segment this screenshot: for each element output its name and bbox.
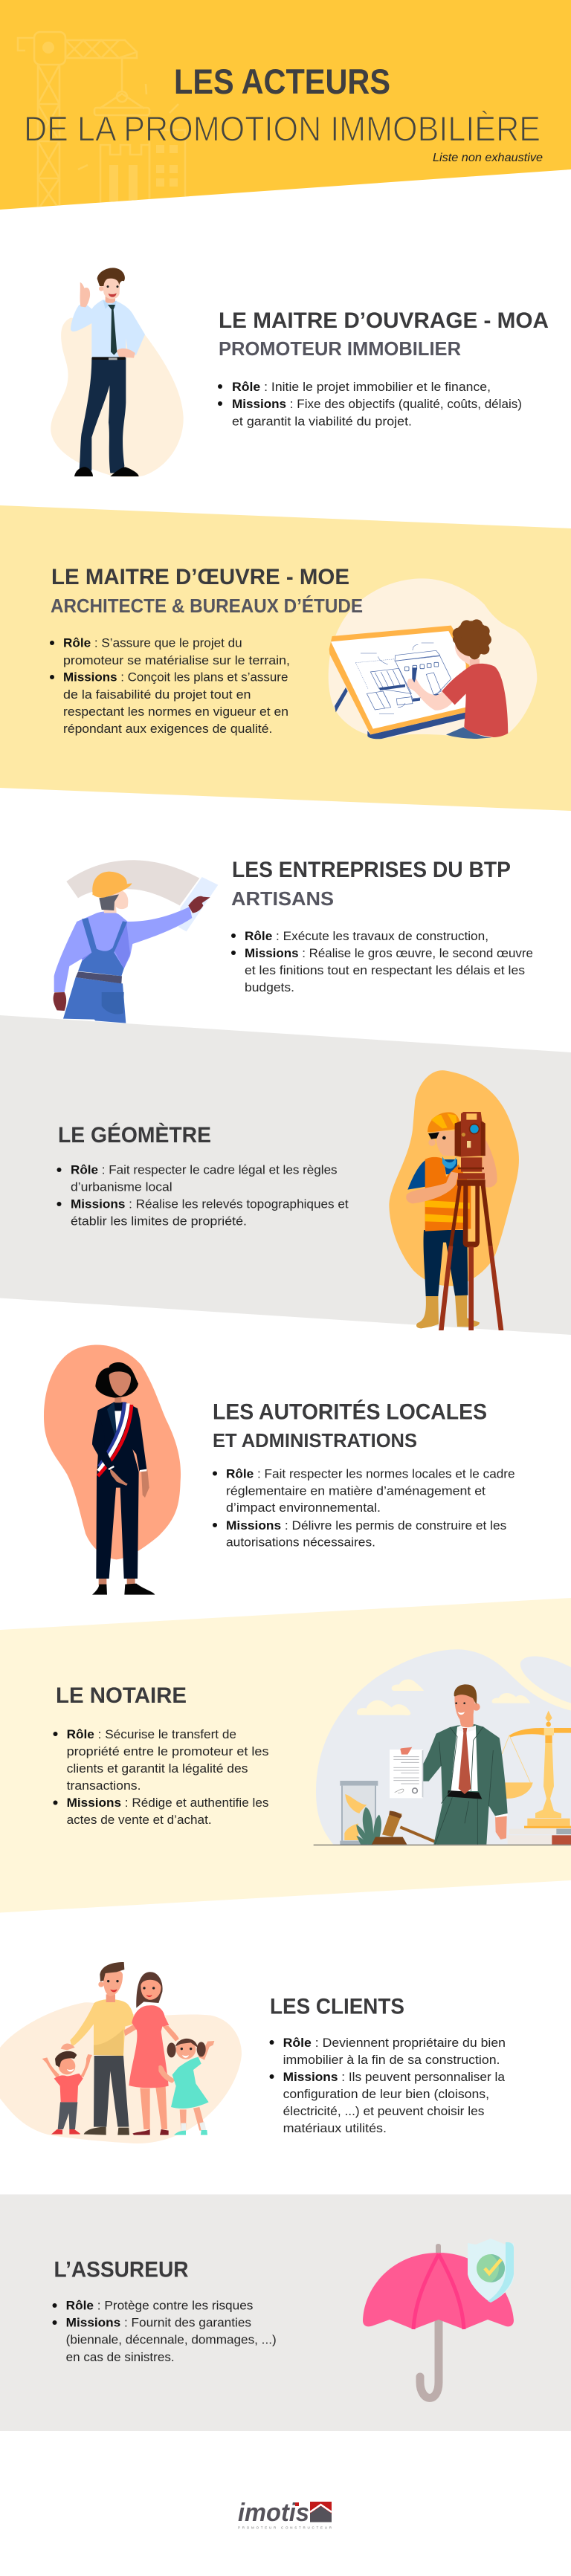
text block: role and missions: d’urbanisme local [71, 1181, 172, 1194]
subheading: ET ADMINISTRATIONS [213, 1429, 417, 1452]
text block: role and missions: configuration de leur bien (cloisons, [283, 2088, 489, 2101]
logo: imotis: imotis [238, 2499, 309, 2527]
illustration: developer giving thumbs up [51, 268, 184, 477]
text block: role and missions: électricité, ...) et peuvent choisir les [283, 2105, 484, 2118]
text block: role and missions: Missions : Rédige et authentifie les [67, 1796, 268, 1810]
title: DE LA PROMOTION IMMOBILIÈRE [24, 109, 541, 149]
text block: role and missions: Rôle : Protège contre les risques [66, 2300, 253, 2313]
text block: role and missions [218, 381, 522, 428]
panel background [0, 1015, 571, 1335]
title: LES ACTEURS [174, 62, 390, 101]
text block: role and missions: Missions : Fixe des objectifs (qualité, coûts, délais) [232, 398, 522, 411]
illustration: architect at drawing board [329, 578, 537, 739]
text block: role and missions: d’impact environnemental. [226, 1501, 381, 1515]
panel: assureur [0, 2194, 571, 2431]
text block: role and missions: et garantit la viabilité du projet. [232, 415, 412, 428]
text block: role and missions: réglementaire en matière d’aménagement et [226, 1484, 486, 1498]
panel background [0, 505, 571, 811]
text block: role and missions: Rôle : S’assure que le projet du [63, 637, 242, 650]
subheading: ARCHITECTE & BUREAUX D’ÉTUDE [51, 595, 363, 617]
text block: role and missions: en cas de sinistres. [66, 2351, 175, 2364]
panel: entreprises du BTP [54, 858, 533, 1023]
text block: role and missions [231, 930, 533, 994]
subheading: ARTISANS [231, 887, 334, 910]
text block: role and missions: propriété entre le promoteur et les [67, 1745, 268, 1758]
panel: header [0, 0, 571, 216]
text block: role and missions: Missions : Réalise les relevés topographiques et [71, 1198, 349, 1211]
text block: role and missions: Rôle : Fait respecter le cadre légal et les règles [71, 1164, 338, 1177]
text block: role and missions [269, 2036, 506, 2135]
header yellow background [0, 0, 571, 210]
text block: role and missions [213, 1467, 515, 1550]
text block: role and missions: matériaux utilités. [283, 2122, 387, 2135]
text block: role and missions [52, 2300, 277, 2364]
text block: role and missions: établir les limites de propriété. [71, 1215, 247, 1229]
heading: LES AUTORITÉS LOCALES [213, 1399, 487, 1424]
illustration: family of four [0, 1962, 242, 2143]
text block: role and missions [50, 637, 290, 736]
text block: role and missions: actes de vente et d’achat. [67, 1813, 212, 1827]
text block: role and missions: Missions : Conçoit les plans et s’assure [63, 671, 288, 685]
icon: umbrella with shield [363, 2239, 514, 2398]
text block: role and missions: transactions. [67, 1779, 141, 1793]
panel background [0, 2194, 571, 2431]
heading: LE GÉOMÈTRE [58, 1122, 211, 1148]
heading: LE MAITRE D’ŒUVRE - MOE [51, 565, 349, 589]
panel: notaire [0, 1598, 571, 1913]
icon: crane and building watermark [18, 32, 185, 216]
text block: role and missions: Missions : Réalise le gros œuvre, le second œuvre [245, 947, 533, 960]
text block: role and missions: budgets. [245, 981, 294, 994]
illustration: surveyor with theodolite [389, 1070, 519, 1330]
heading: LES ENTREPRISES DU BTP [232, 858, 511, 882]
heading: LE MAITRE D’OUVRAGE - MOA [219, 308, 549, 333]
panel: maitre d'ouvrage [51, 268, 549, 477]
text block: role and missions: (biennale, décennale, dommages, ...) [66, 2334, 277, 2347]
text block: role and missions [57, 1164, 349, 1229]
panel: maitre d'oeuvre [0, 505, 571, 811]
text block: role and missions: Rôle : Sécurise le transfert de [67, 1728, 236, 1741]
subheading: PROMOTEUR IMMOBILIER [219, 337, 461, 360]
panel background [0, 1598, 571, 1913]
text block: role and missions: Rôle : Fait respecter les normes locales et le cadre [226, 1467, 515, 1480]
text block: role and missions [54, 1728, 269, 1827]
text block: role and missions: respectant les normes en vigueur et en [63, 705, 288, 719]
title [24, 62, 541, 149]
text block: role and missions: répondant aux exigences de qualité. [63, 722, 272, 736]
panel: géomètre [0, 1015, 571, 1335]
panel: autorités locales [44, 1344, 515, 1595]
text block: role and missions: clients et garantit la légalité des [67, 1762, 248, 1776]
text block: role and missions: Rôle : Initie le projet immobilier et le finance, [232, 381, 491, 394]
heading: L’ASSUREUR [54, 2258, 189, 2282]
heading: LE NOTAIRE [56, 1683, 187, 1708]
text block: role and missions: Missions : Délivre les permis de construire et les [226, 1519, 506, 1533]
text block: role and missions: immobilier à la fin de sa construction. [283, 2054, 500, 2067]
panel: clients [0, 1962, 506, 2143]
heading: LES CLIENTS [270, 1995, 404, 2019]
text block: role and missions: de la faisabilité du projet tout en [63, 688, 251, 702]
text block: role and missions: autorisations nécessaires. [226, 1536, 375, 1550]
text block: role and missions: Missions : Fournit des garanties [66, 2316, 251, 2329]
illustration: construction worker [54, 860, 218, 1023]
text block: role and missions: et les finitions tout en respectant les délais et les [245, 964, 525, 977]
subtitle note: Liste non exhaustive [433, 152, 543, 164]
illustration: mayor with tricolour sash [44, 1344, 181, 1595]
text block: role and missions: Rôle : Deviennent propriétaire du bien [283, 2036, 506, 2050]
illustration: notary with document, gavel and scales [314, 1649, 571, 1845]
text block: role and missions: promoteur se matérialise sur le terrain, [63, 654, 290, 667]
logo: imotis: PROMOTEUR CONSTRUCTEUR [238, 2525, 332, 2530]
text block: role and missions: Missions : Ils peuvent personnaliser la [283, 2071, 506, 2084]
text block: role and missions: Rôle : Exécute les travaux de construction, [245, 930, 488, 943]
